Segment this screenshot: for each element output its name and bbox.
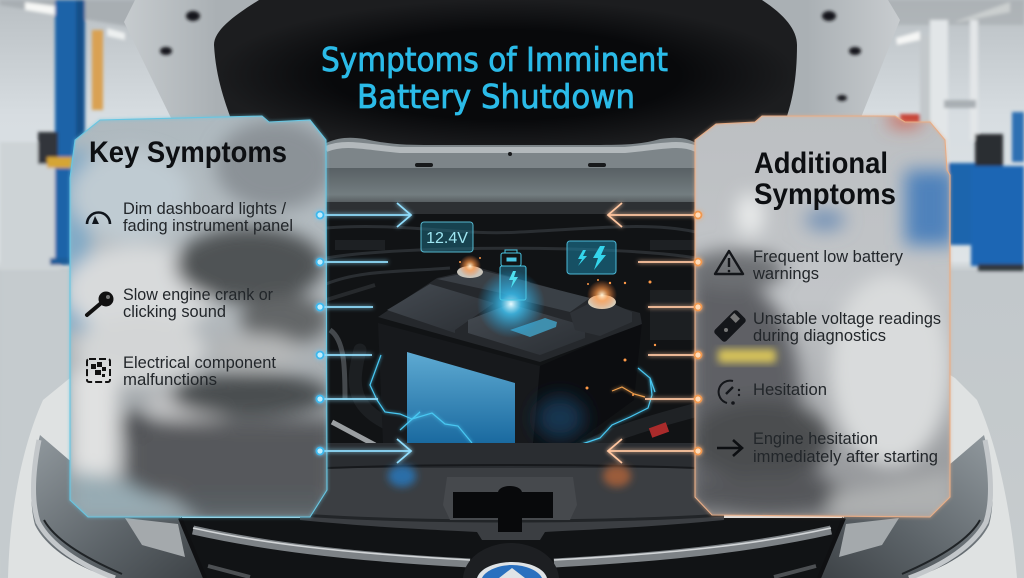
item: hesitation: Hesitation <box>753 381 827 399</box>
orange connector arrows <box>608 203 702 463</box>
item: unstable voltage readings: during diagnostics <box>753 327 886 345</box>
battery terminals <box>457 255 617 310</box>
holographic 12.4V readout: 12.4V <box>426 230 468 247</box>
car body and fenders <box>8 300 1017 578</box>
heading: additional symptoms: Symptoms <box>754 178 896 211</box>
item: engine hesitation: immediately after starting <box>753 448 938 466</box>
frosted glass background <box>70 116 326 516</box>
item: electrical malfunctions: Electrical component <box>123 354 276 372</box>
item: low battery warnings: warnings <box>752 265 819 283</box>
item: slow engine crank <box>87 286 273 321</box>
holographic 12.4V readout <box>421 222 473 252</box>
item: low battery warnings: Frequent low battery <box>753 248 904 266</box>
panel: key symptoms <box>60 110 340 530</box>
item: unstable voltage readings <box>713 309 941 345</box>
blue connector arrows <box>316 203 411 463</box>
grille badge <box>463 543 559 578</box>
holographic battery icon <box>500 250 526 300</box>
engine bay <box>326 214 696 447</box>
panel: additional symptoms <box>685 110 960 530</box>
title <box>321 40 668 116</box>
item: electrical malfunctions: malfunctions <box>123 371 217 389</box>
central glow <box>477 270 545 338</box>
hood lower rim <box>326 138 696 172</box>
frosted glass background <box>696 116 950 516</box>
cowl panel and latch <box>300 443 724 540</box>
left headlight <box>31 435 205 578</box>
item: dim dashboard lights: Dim dashboard lights / <box>123 200 286 218</box>
sparks <box>459 257 656 396</box>
item: low battery warnings <box>715 248 904 283</box>
item: engine hesitation: Engine hesitation <box>753 430 878 448</box>
front grille <box>180 518 844 578</box>
item: hesitation <box>719 381 827 405</box>
title: Symptoms of Imminent <box>321 40 668 79</box>
item: engine hesitation <box>717 430 938 466</box>
holographic lightning box <box>567 241 616 274</box>
item: slow engine crank: Slow engine crank or <box>123 286 273 304</box>
battery side faces <box>378 322 642 443</box>
battery <box>378 255 642 443</box>
item: dim dashboard lights <box>87 200 293 235</box>
battery lid <box>378 268 642 362</box>
open hood <box>124 0 900 216</box>
item: dim dashboard lights: fading instrument panel <box>123 217 293 235</box>
lightning arcs <box>370 355 655 444</box>
heading: key symptoms: Key Symptoms <box>89 136 287 169</box>
item: unstable voltage readings: Unstable voltage readings <box>753 310 941 328</box>
heading: additional symptoms <box>754 147 896 211</box>
title: Battery Shutdown <box>357 77 635 116</box>
heading: additional symptoms: Additional <box>754 147 888 180</box>
right headlight <box>819 435 993 578</box>
item: slow engine crank: clicking sound <box>123 303 226 321</box>
item: electrical malfunctions <box>87 354 276 389</box>
